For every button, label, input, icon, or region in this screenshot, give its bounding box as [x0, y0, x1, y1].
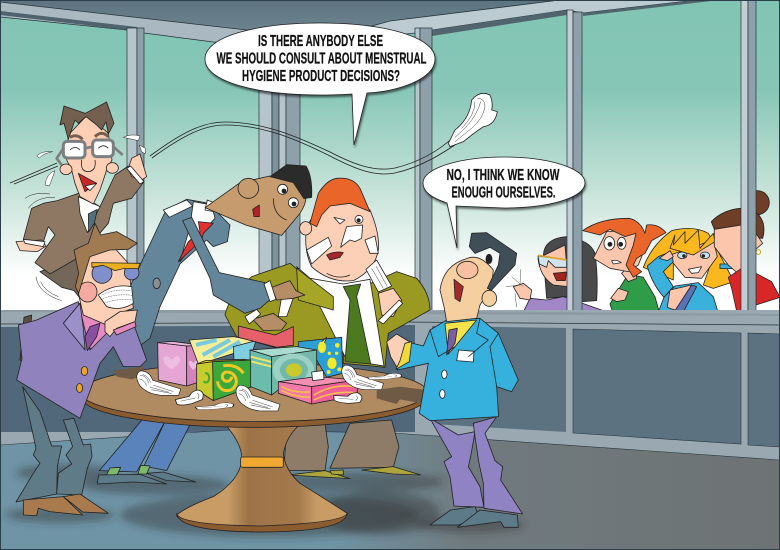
- speech bubble: top: [205, 23, 435, 145]
- woman with orange hair and green sweater: [583, 218, 666, 312]
- tabletop edge: [81, 366, 427, 427]
- ears: [60, 164, 72, 175]
- hair: [74, 223, 137, 293]
- surgical mask: [98, 286, 133, 309]
- leaning man's cuffs: [245, 281, 276, 324]
- striped box: [189, 337, 257, 364]
- woman with hair bun and red suit: [711, 191, 780, 314]
- flying pad: [448, 93, 497, 147]
- glasses: [57, 140, 123, 165]
- jacket: [23, 166, 144, 274]
- bubble text: IS THERE ANYBODY ELSE: [258, 33, 383, 50]
- red-haired man, behind table: [225, 178, 430, 367]
- ear: [482, 290, 497, 306]
- gold buttons: [76, 366, 88, 392]
- shadows on tabletop: [113, 367, 427, 404]
- head: [306, 202, 379, 281]
- legs and shoes: [16, 387, 108, 516]
- hair: [469, 233, 517, 290]
- ear: [300, 222, 312, 235]
- bubble outline: [423, 157, 585, 248]
- purple jacket: [17, 302, 147, 418]
- bubble text: NO, I THINK WE KNOW: [446, 167, 560, 184]
- blue man's raised hand: [387, 334, 409, 367]
- left hand: [16, 240, 46, 252]
- bubble text: WE SHOULD CONSULT ABOUT MENSTRUAL: [216, 50, 427, 68]
- motion lines of the flying pad: [10, 122, 462, 184]
- buttons: [442, 370, 447, 379]
- raised hand: [128, 154, 147, 180]
- lapel: [163, 200, 193, 217]
- eyes: [334, 217, 345, 224]
- shirt and tie: [78, 197, 100, 233]
- blue trousers: [99, 418, 165, 472]
- jacket: [397, 318, 518, 421]
- teal swirl box: [250, 347, 317, 395]
- pad held by leaning man: [278, 291, 295, 317]
- neck and face: [78, 247, 133, 325]
- sleeve lines: [430, 318, 498, 387]
- lower wall panels: [0, 310, 780, 475]
- face: [67, 115, 112, 204]
- bubble text: HYGIENE PRODUCT DECISIONS?: [242, 68, 400, 85]
- yellow cuff: [396, 342, 412, 369]
- jacket button: [153, 278, 160, 289]
- legs: [40, 257, 84, 303]
- window top beams: [0, 0, 720, 46]
- jacket: [125, 199, 230, 347]
- dark shoes: [430, 507, 480, 525]
- hair: [310, 178, 370, 227]
- left trouser leg: [430, 418, 484, 507]
- bubble outline: [205, 23, 435, 145]
- purple-suited man with mask: [16, 223, 147, 516]
- purple tie: [85, 323, 100, 351]
- brown trousers: [284, 423, 328, 471]
- man in bright blue jacket: [387, 233, 523, 527]
- floor shadows: [5, 464, 525, 537]
- tabletop: [81, 363, 427, 422]
- hand on chin: [105, 310, 137, 337]
- white shirt: [297, 267, 384, 366]
- pink shirt and tie: [79, 303, 113, 350]
- window mullions: [127, 0, 756, 320]
- eyebrows: [70, 133, 108, 139]
- eyes: [278, 184, 288, 194]
- pink hearts box: [158, 341, 201, 386]
- round table: [81, 363, 427, 532]
- purple tie: [447, 328, 457, 355]
- motion lines: [25, 193, 62, 301]
- product boxes on the table: [137, 281, 402, 411]
- red star box: [238, 326, 293, 347]
- bubble text: [216, 33, 427, 85]
- pad in hand: [366, 260, 392, 292]
- lapel: [297, 268, 333, 310]
- window glass with teal sky gradient: [1, 1, 779, 264]
- mouth: [454, 279, 463, 302]
- sanitary pads on the table: [137, 365, 402, 411]
- face: [440, 257, 493, 322]
- bubble text: [446, 167, 560, 202]
- ear: [238, 178, 259, 198]
- inner shirt area: [180, 202, 215, 262]
- lapels: [63, 303, 85, 350]
- women behind the glass: [506, 191, 780, 314]
- nose: [457, 261, 478, 279]
- leaning man's trousers, and red-haired man's trousers: [97, 418, 421, 484]
- pedestal foot edge: [177, 513, 347, 532]
- socks: [106, 467, 121, 476]
- gold ring: [241, 457, 283, 467]
- speech bubble: lower right: [423, 157, 585, 248]
- hanging arm: [183, 217, 272, 313]
- sunglasses: [92, 263, 112, 283]
- mouth: [327, 252, 343, 260]
- raised hand: [378, 288, 402, 317]
- eye: [486, 254, 492, 264]
- red tie: [178, 222, 213, 262]
- floor: [0, 430, 780, 550]
- pedestal: [177, 426, 347, 532]
- bandages: [307, 225, 378, 264]
- blonde woman in blue jacket: [643, 228, 734, 314]
- badge: [457, 350, 474, 362]
- black hair: [270, 165, 312, 199]
- dark shoes: [97, 474, 167, 484]
- mouth: [253, 205, 259, 217]
- head: [205, 176, 306, 235]
- pink tissue box: [278, 371, 357, 404]
- blue dotted box: [298, 337, 343, 377]
- ear: [78, 282, 97, 302]
- green tie: [343, 284, 371, 364]
- lower leg wedge: [20, 315, 32, 365]
- nose and mouth: [81, 160, 95, 172]
- bubble text: ENOUGH OURSELVES.: [452, 184, 556, 202]
- jacket: [225, 263, 430, 367]
- background: office ceiling: [0, 0, 780, 60]
- leaning man's hands: [253, 281, 305, 331]
- green swirl box: [197, 359, 251, 401]
- right trouser leg: [473, 417, 523, 514]
- leaning man in blue-grey suit: [125, 165, 312, 347]
- woman with glasses and dark hair: [506, 237, 603, 311]
- man with glasses being kicked up: [16, 102, 147, 365]
- sweat drops: [37, 135, 145, 186]
- olive shoes: [288, 471, 350, 479]
- hair: [60, 102, 114, 139]
- yellow shirt: [445, 320, 477, 354]
